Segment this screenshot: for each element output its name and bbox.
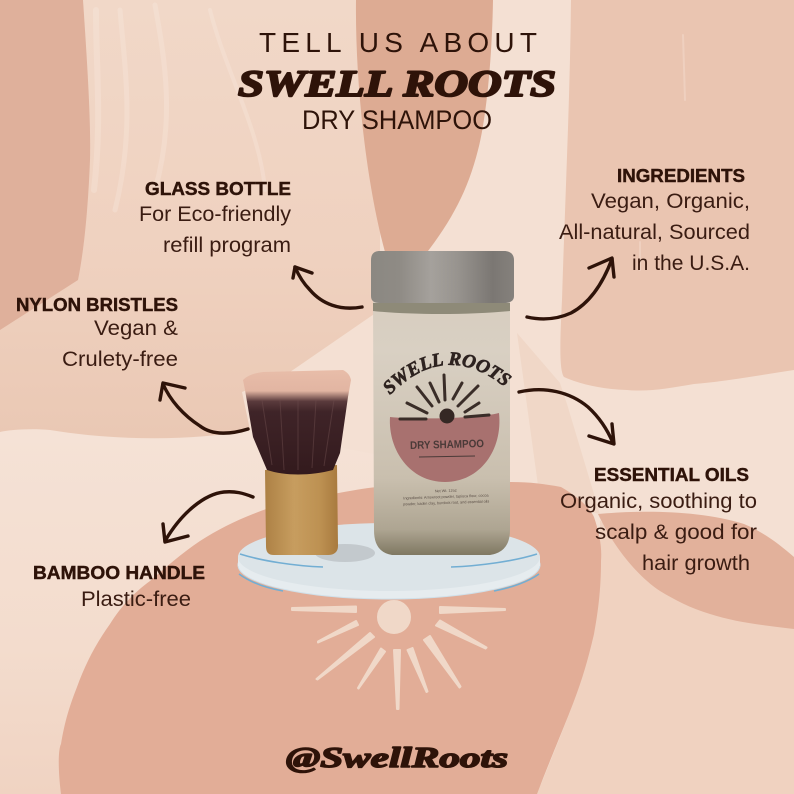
label: ingredients: Ingredients: Arrowroot powder, tapioca flour, cocoa: [403, 493, 490, 500]
brush bristles: [243, 370, 351, 474]
arrow: ingredients: [527, 258, 614, 319]
arrow: essential oils: [519, 390, 614, 444]
callout: nylon bristles: [16, 295, 178, 371]
callout: nylon bristles: Vegan &: [94, 317, 178, 340]
jar body: [373, 300, 510, 555]
callout: nylon bristles: NYLON BRISTLES: [16, 295, 178, 315]
glass jar: [371, 251, 514, 555]
callout: glass bottle: For Eco-friendly: [139, 203, 292, 226]
arrow: nylon bristles: [160, 383, 248, 433]
label: ingredients: powder, kaolin clay, burdock root, and essential oils: [403, 499, 489, 507]
title: tell us about: TELL US ABOUT: [259, 27, 537, 58]
decorative sun: [292, 601, 505, 709]
callout: glass bottle: GLASS BOTTLE: [145, 179, 291, 199]
makeup brush: [243, 370, 351, 555]
callout: essential oils: ESSENTIAL OILS: [594, 465, 749, 485]
arrow: glass bottle: [293, 267, 362, 308]
brush handle: [265, 465, 338, 555]
callout: bamboo handle: BAMBOO HANDLE: [33, 563, 205, 583]
callout: glass bottle: refill program: [163, 234, 291, 257]
subtitle: dry shampoo: DRY SHAMPOO: [302, 105, 492, 135]
callout: essential oils: [560, 465, 757, 575]
acrylic display plate: [238, 523, 540, 599]
title: swell roots: SWELL ROOTS: [238, 64, 556, 105]
callout: ingredients: in the U.S.A.: [632, 252, 750, 275]
callout: bamboo handle: Plastic-free: [81, 588, 191, 611]
callout: essential oils: Organic, soothing to: [560, 490, 757, 513]
callout: glass bottle: [139, 179, 292, 257]
jar lid: [371, 251, 514, 303]
callout: ingredients: All-natural, Sourced: [559, 221, 750, 244]
callout: ingredients: Vegan, Organic,: [591, 190, 750, 213]
brush strokes texture: [94, 5, 685, 270]
label: ingredients: Net Wt. 12oz: [435, 489, 457, 493]
callout: bamboo handle: [33, 563, 205, 611]
callout: ingredients: [559, 166, 750, 275]
glass jar: SWELL ROOTS: [384, 352, 512, 395]
label: sun rays: [400, 375, 489, 419]
callout: ingredients: INGREDIENTS: [617, 166, 745, 186]
arrow: bamboo handle: [163, 492, 253, 542]
label: dry shampoo: DRY SHAMPOO: [410, 438, 485, 452]
label: brand arc: [389, 365, 506, 396]
callout: essential oils: hair growth: [642, 552, 750, 575]
handle: @SwellRoots: @SwellRoots: [286, 742, 508, 774]
callout: nylon bristles: Crulety-free: [62, 348, 178, 371]
callout: essential oils: scalp & good for: [595, 521, 757, 544]
label: semicircle: [390, 413, 499, 482]
label: ingredients: [403, 487, 490, 507]
